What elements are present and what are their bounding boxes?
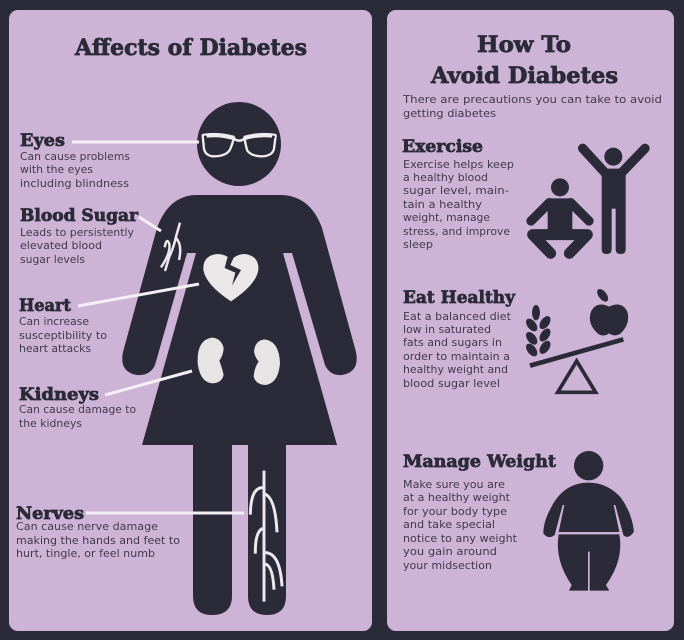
description: kidneys: the kidneys: [19, 418, 82, 430]
icon: kidneys: [198, 338, 280, 385]
description: exercise: stress, and improve: [403, 226, 510, 238]
description: nerves: [16, 521, 180, 560]
description: exercise: sleep: [403, 239, 433, 251]
description: eat healthy: blood sugar level: [403, 378, 500, 390]
icon: wheat and apple on a seesaw: [524, 287, 628, 392]
head: [197, 102, 281, 186]
description: exercise: Exercise helps keep: [403, 159, 514, 171]
description: nerves: hurt, tingle, or feel numb: [16, 548, 155, 560]
heading: how to avoid diabetes: Avoid Diabetes: [430, 63, 618, 89]
section: manage weight: [403, 451, 634, 591]
heading: how to avoid diabetes: How To: [477, 32, 571, 58]
description: nerves: Can cause nerve damage: [16, 521, 158, 533]
description: exercise: sugar level, main-: [403, 185, 509, 197]
wheat: [524, 305, 553, 358]
callout: blood sugar: [20, 206, 161, 266]
leader line: eyes: [72, 140, 199, 144]
description: manage weight: [403, 479, 517, 572]
description: exercise: [403, 159, 514, 251]
heading: affects of diabetes: Affects of Diabetes: [74, 35, 307, 61]
leader line: nerves: [86, 512, 244, 514]
description: heart: Can increase: [19, 316, 89, 328]
intro text: [402, 94, 662, 120]
leader line: heart: [78, 284, 199, 306]
figure: woman silhouette with affected organs: [122, 102, 357, 615]
label: heart: Heart: [19, 296, 71, 316]
description: blood sugar: elevated blood: [20, 240, 102, 252]
description: manage weight: you gain around: [403, 546, 497, 558]
description: eat healthy: Eat a balanced diet: [403, 311, 511, 323]
label: manage weight: Manage Weight: [403, 452, 556, 472]
callout: eyes: [20, 131, 199, 190]
section: exercise: [402, 137, 645, 254]
description: manage weight: notice to any weight: [403, 533, 517, 545]
label: eyes: Eyes: [20, 131, 65, 151]
label: eat healthy: Eat Healthy: [403, 288, 516, 308]
icon: leg nerves: [250, 471, 282, 602]
body silhouette: [122, 195, 357, 615]
icon: glasses: [203, 135, 276, 156]
callout: kidneys: [19, 371, 192, 430]
description: eat healthy: healthy weight and: [403, 364, 508, 376]
description: eat healthy: low in saturated: [403, 324, 491, 336]
description: eyes: [20, 151, 130, 190]
description: manage weight: at a healthy weight: [403, 492, 510, 504]
label: exercise: Exercise: [402, 137, 483, 157]
description: exercise: a healthy blood: [403, 172, 488, 184]
callout: nerves: [16, 504, 244, 560]
description: eat healthy: order to maintain a: [403, 351, 510, 363]
leader line: blood sugar: [139, 217, 161, 231]
icon: overweight person: [543, 451, 634, 591]
description: heart: heart attacks: [19, 343, 91, 355]
description: manage weight: Make sure you are: [403, 479, 505, 491]
standing figure: [583, 148, 645, 254]
seesaw: [530, 339, 623, 366]
panel: how to avoid diabetes: [387, 10, 674, 631]
description: blood sugar: sugar levels: [20, 254, 85, 266]
description: heart: susceptibility to: [19, 330, 107, 342]
description: exercise: weight, manage: [403, 212, 490, 224]
description: kidneys: [19, 404, 136, 430]
description: eyes: Can cause problems: [20, 151, 130, 163]
panel: affects of diabetes: [9, 10, 372, 631]
section: eat healthy: [403, 287, 628, 392]
description: manage weight: and take special: [403, 519, 495, 531]
label: kidneys: Kidneys: [19, 385, 99, 405]
apple: [590, 287, 628, 336]
description: heart: [19, 316, 107, 355]
description: nerves: making the hands and feet to: [16, 535, 180, 547]
description: manage weight: your midsection: [403, 560, 492, 572]
description: eyes: including blindness: [20, 178, 129, 190]
icon: broken heart: [203, 254, 258, 301]
label: nerves: Nerves: [16, 504, 84, 524]
intro text: getting diabetes: [403, 108, 496, 120]
icon: blood vessel on arm: [161, 223, 180, 271]
right panel background: [387, 10, 674, 631]
description: blood sugar: [20, 227, 134, 266]
leader line: kidneys: [105, 371, 192, 395]
label: blood sugar: Blood Sugar: [20, 206, 139, 226]
description: eyes: with the eyes: [20, 164, 93, 176]
icon: people exercising: [531, 148, 645, 254]
left panel background: [9, 10, 372, 631]
description: blood sugar: Leads to persistently: [20, 227, 134, 239]
sitting figure: [531, 178, 589, 253]
heading: how to avoid diabetes: [430, 32, 618, 89]
description: eat healthy: fats and sugars in: [403, 337, 502, 349]
description: manage weight: for your body type: [403, 506, 507, 518]
callout: heart: [19, 284, 199, 355]
description: eat healthy: [403, 311, 511, 390]
intro text: There are precautions you can take to avoid: [402, 94, 662, 106]
description: exercise: tain a healthy: [403, 199, 482, 211]
description: kidneys: Can cause damage to: [19, 404, 136, 416]
